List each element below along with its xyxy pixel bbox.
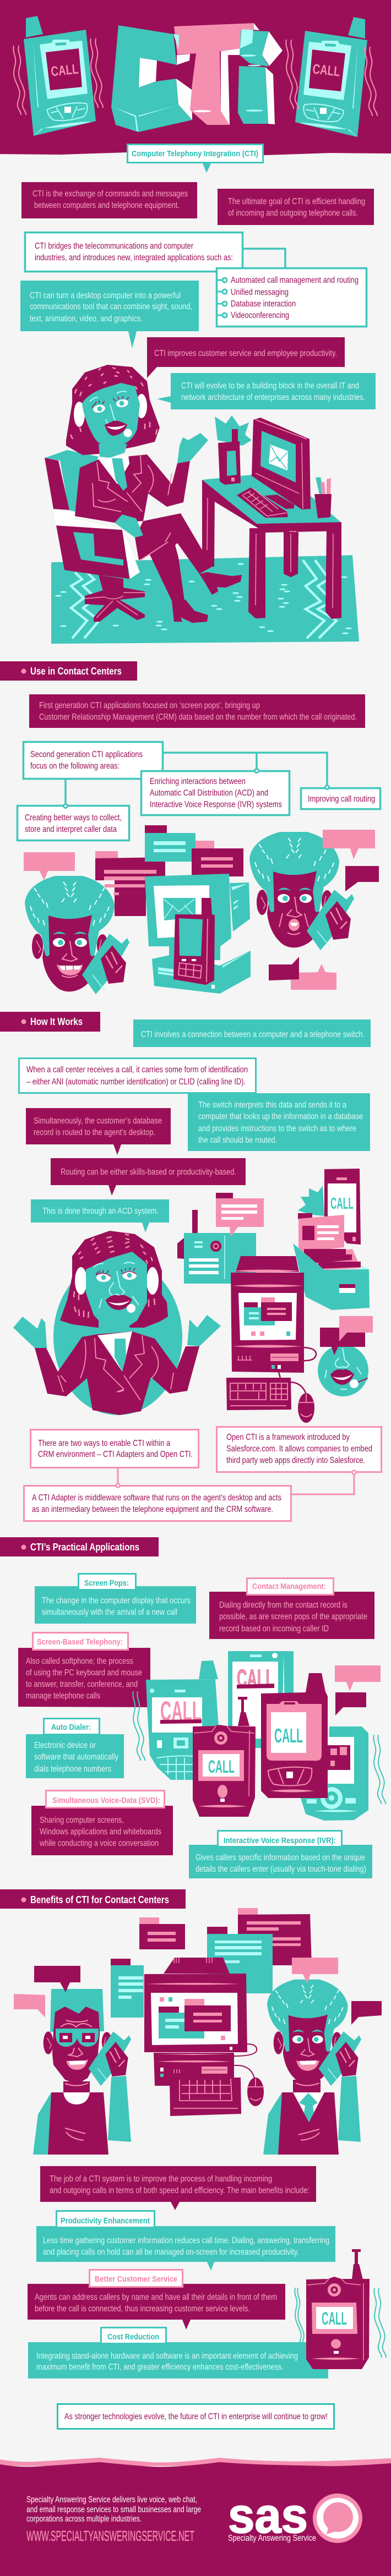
logo: SAS: Specialty Answering Service bbox=[228, 2534, 316, 2543]
card: Productivity Enhancement bbox=[36, 2211, 335, 2271]
speech bubble: ACD system: This is done through an ACD system. bbox=[42, 1207, 159, 1216]
speech bubble: desktop computer: text, animation, video, and graphics. bbox=[30, 314, 143, 324]
speech bubble: maroon over man with glasses bbox=[34, 1966, 80, 1992]
card: Screen Pops: simultaneously with the arrival of a new call bbox=[42, 1608, 177, 1617]
text block: exchange of commands bbox=[21, 182, 197, 218]
text block: enriching interactions: Automatic Call Distribution (ACD) and bbox=[150, 788, 268, 798]
card: Auto Dialer: software that automatically bbox=[34, 1752, 118, 1762]
footer text bbox=[26, 2495, 201, 2544]
section heading: Use in Contact Centers: Use in Contact Centers bbox=[30, 666, 122, 677]
icon: left ringing phone bbox=[13, 16, 103, 136]
text block: ultimate goal: The ultimate goal of CTI is efficient handling bbox=[228, 197, 365, 206]
illustration: cluster of phones: CALL bbox=[237, 1664, 274, 1692]
illustration: desktop computer bbox=[144, 1958, 264, 2116]
connector: pink links bbox=[118, 1468, 354, 1494]
list: integrated applications: Videoconferencing bbox=[231, 311, 289, 320]
illustration: seated woman agent bbox=[66, 365, 242, 623]
card: Better Customer Service: Better Customer Service bbox=[95, 2274, 177, 2284]
illustration: phone and file box: CALL bbox=[330, 1195, 354, 1213]
text block: future of CTI: As stronger technologies evolve, the future of CTI in enterprise will continue to grow! bbox=[64, 2412, 328, 2421]
speech bubble: desktop computer bbox=[20, 281, 199, 348]
text block: ultimate goal bbox=[218, 189, 374, 225]
speech bubble: improves service bbox=[147, 337, 345, 378]
card: Auto Dialer bbox=[26, 1719, 124, 1778]
illustration: cluster of phones: CALL bbox=[160, 1696, 202, 1727]
text block: CTI Adapter: A CTI Adapter is middleware software that runs on the agent’s desktop and acts bbox=[32, 1493, 281, 1503]
text block: exchange of commands: between computers and telephone equipment. bbox=[34, 201, 180, 210]
card: Screen-Based Telephony: Screen-Based Telephony: bbox=[37, 1637, 123, 1647]
illustration: cluster of phones bbox=[133, 1651, 385, 1821]
text block: job of a CTI system: The job of a CTI system is to improve the process of handling incoming bbox=[50, 2174, 272, 2184]
logo: SAS bbox=[228, 2489, 362, 2544]
speech bubble: desktop computer: CTI can turn a desktop computer into a powerful bbox=[30, 291, 181, 300]
text block: CTI bridges: industries, and introduces new, integrated applications such as: bbox=[35, 253, 233, 262]
text block: creating better ways: store and interpret caller data bbox=[25, 825, 117, 834]
illustration: man with glasses bbox=[33, 1989, 131, 2155]
speech bubble: customer database bbox=[26, 1108, 171, 1155]
footer text: Specialty Answering Service delivers live voice, web chat, bbox=[26, 2495, 197, 2504]
text block: creating better ways: Creating better ways to collect, bbox=[25, 813, 122, 823]
text block: call identification: When a call center receives a call, it carries some form of identification bbox=[26, 1065, 248, 1075]
text block: job of a CTI system bbox=[40, 2166, 316, 2210]
card: Auto Dialer: Auto Dialer: bbox=[51, 1723, 91, 1732]
illustration: folders and computer bbox=[95, 825, 251, 994]
card: Simultaneous Voice-Data: Windows applications and whiteboards bbox=[40, 1827, 161, 1837]
text block: second generation: focus on the following areas: bbox=[30, 761, 120, 771]
card: Screen-Based Telephony: to answer, transfer, conference, and bbox=[26, 1680, 138, 1689]
speech bubble: customer database: record is routed to the agent’s desktop. bbox=[34, 1128, 155, 1137]
illustration: office chair bbox=[45, 450, 145, 622]
footer text: and email response services to small businesses and large bbox=[26, 2505, 201, 2514]
card: Simultaneous Voice-Data bbox=[31, 1790, 173, 1855]
speech bubble: decorative pink left bbox=[24, 852, 75, 880]
connectors: second generation tree bbox=[66, 753, 327, 805]
card: Auto Dialer: Electronic device or bbox=[34, 1741, 96, 1750]
illustration: phone and file box bbox=[293, 1169, 370, 1310]
text block: first generation bbox=[29, 694, 365, 728]
speech bubble: maroon upper right bbox=[345, 866, 379, 891]
section heading: CTI's Practical Applications: CTI’s Practical Applications bbox=[30, 1542, 139, 1553]
text block: the switch interprets: and provides instructions to the switch as to where bbox=[198, 1124, 356, 1133]
text block: improving call routing bbox=[301, 786, 380, 809]
text block: call identification: – either ANI (automatic number identification) or CLID (calling line ID). bbox=[26, 1077, 246, 1087]
card: Simultaneous Voice-Data: Sharing computer screens, bbox=[40, 1816, 124, 1825]
text block: connection bbox=[133, 1020, 371, 1047]
list: integrated applications: Automated call management and routing bbox=[231, 276, 359, 285]
speech bubble: improves service: CTI improves customer service and employee productivity. bbox=[154, 349, 337, 358]
card: Screen Pops: The change in the computer display that occurs bbox=[42, 1596, 191, 1605]
card: Screen Pops bbox=[35, 1574, 196, 1624]
card: Screen Pops: Screen Pops: bbox=[84, 1579, 129, 1588]
text block: CTI Adapter bbox=[24, 1483, 291, 1521]
speech bubble: desktop computer: communications tool that can combine sight, sound, bbox=[30, 302, 192, 311]
text block: ultimate goal: of incoming and outgoing telephone calls. bbox=[228, 209, 358, 218]
text block: Open CTI: third party web apps directly into Salesforce. bbox=[226, 1456, 365, 1465]
logo: SAS: sas bbox=[228, 2489, 308, 2544]
section heading: Benefits: Benefits of CTI for Contact Centers bbox=[30, 1894, 169, 1905]
text block: the switch interprets: The switch interprets this data and sends it to a bbox=[198, 1100, 346, 1110]
card: Productivity Enhancement: Less time gathering customer information reduces call time. Dialing, answering, transferring bbox=[43, 2236, 329, 2245]
speech bubble: building block bbox=[157, 373, 376, 409]
card: Productivity Enhancement: Productivity Enhancement bbox=[61, 2216, 150, 2226]
card: Screen-Based Telephony bbox=[18, 1633, 150, 1707]
header band bbox=[0, 0, 391, 155]
footer wave and band bbox=[0, 2458, 391, 2576]
illustration: woman's head lower right bbox=[318, 1345, 368, 1396]
card: Contact Management: Contact Management: bbox=[252, 1582, 326, 1591]
illustration: floating documents bbox=[111, 1908, 312, 2018]
illustration: man with vest and tie bbox=[263, 1980, 361, 2155]
text block: two ways: There are two ways to enable CTI within a bbox=[38, 1439, 170, 1448]
speech bubble: pink center right bbox=[292, 1958, 338, 1983]
footer text: corporations across multiple industries. bbox=[26, 2514, 142, 2524]
icon: left ringing phone: CALL bbox=[50, 61, 79, 80]
section heading: How It Works: How It Works bbox=[30, 1016, 83, 1027]
illustration: router with pink note bbox=[177, 1193, 264, 1284]
card: Better Customer Service: Agents can address callers by name and have all their details in front of them bbox=[35, 2293, 277, 2302]
text block: CTI bridges bbox=[25, 232, 242, 272]
speech bubbles: phones cluster bbox=[335, 1665, 381, 1715]
text block: first generation: First generation CTI applications focused on ‘screen pops’, bringing up bbox=[39, 701, 260, 710]
card: Screen-Based Telephony: manage telephone calls bbox=[26, 1691, 100, 1701]
card: Auto Dialer: dials telephone numbers bbox=[34, 1764, 111, 1774]
text block: Open CTI bbox=[217, 1427, 381, 1475]
speech bubble: customer database: Simultaneously, the customer’s database bbox=[34, 1116, 162, 1126]
illustration: desktop computer with keyboard and mouse bbox=[226, 1256, 316, 1423]
card: Screen-Based Telephony: Also called softphone; the process bbox=[26, 1657, 133, 1666]
section heading: How It Works bbox=[0, 1012, 100, 1032]
section heading: CTI's Practical Applications bbox=[0, 1537, 159, 1556]
speech bubble: pink upper right bbox=[323, 830, 375, 859]
text block: future of CTI bbox=[57, 2404, 334, 2429]
illustration: man on phone right bbox=[249, 832, 354, 950]
illustration: phone beside benefits bbox=[295, 2249, 386, 2369]
speech bubbles: lower right pair bbox=[269, 957, 336, 990]
card: Cost Reduction bbox=[28, 2327, 328, 2378]
illustration: man on phone left bbox=[25, 876, 129, 994]
text block: the switch interprets: the call should be routed. bbox=[198, 1136, 277, 1145]
speech bubble: building block: CTI will evolve to be a building block in the overall IT and bbox=[181, 381, 359, 391]
subtitle callout bbox=[128, 144, 263, 173]
card: Cost Reduction: Cost Reduction bbox=[107, 2332, 159, 2342]
illustration: desk with computer bbox=[202, 415, 341, 619]
section heading: Use in Contact Centers bbox=[0, 661, 137, 681]
illustration: woman agent with arms raised bbox=[13, 1231, 221, 1415]
speech bubbles: above lower right head bbox=[320, 1316, 373, 1355]
icon: right ringing phone bbox=[286, 17, 377, 137]
card: Productivity Enhancement: and placing calls on hold can all be managed on-screen for increased productivity. bbox=[43, 2248, 299, 2257]
subtitle callout: Computer Telephony Integration (CTI) bbox=[132, 149, 258, 158]
card: Contact Management: Dialing directly from the contact record is bbox=[219, 1601, 347, 1610]
section heading: Benefits bbox=[0, 1889, 186, 1909]
card: Better Customer Service bbox=[28, 2270, 285, 2330]
footer text: WWW.SPECIALTYANSWERINGSERVICE.NET bbox=[26, 2528, 194, 2544]
speech bubble: pink beside man with glasses bbox=[14, 1994, 45, 2018]
text block: improving call routing: Improving call routing bbox=[308, 794, 375, 804]
card: Simultaneous Voice-Data: while conducting a voice conversation bbox=[39, 1839, 159, 1848]
illustration: cluster of phones: CALL bbox=[208, 1757, 235, 1777]
text block: second generation bbox=[23, 742, 163, 779]
text block: two ways: CRM environment – CTI Adapters and Open CTI. bbox=[38, 1450, 193, 1459]
card: Better Customer Service: before the call is connected, thus increasing customer service levels. bbox=[35, 2304, 250, 2314]
card: Cost Reduction: maximum benefit from CTI, and greater efficiency enhances cost-effectiveness. bbox=[36, 2363, 284, 2372]
text block: Open CTI: Open CTI is a framework introduced by bbox=[226, 1433, 350, 1442]
text block: creating better ways bbox=[18, 804, 129, 841]
speech bubble: maroon far right bbox=[351, 2001, 382, 2025]
text block: job of a CTI system: and outgoing calls in terms of both speed and efficiency. The main benefits include: bbox=[50, 2186, 309, 2195]
illustration: cluster of phones: CALL bbox=[274, 1724, 303, 1747]
card: Interactive Voice Response: Interactive Voice Response (IVR): bbox=[224, 1836, 336, 1845]
icon: right ringing phone: CALL bbox=[312, 61, 341, 80]
text block: CTI Adapter: as an intermediary between the telephone equipment and the CRM software. bbox=[32, 1505, 273, 1514]
text block: enriching interactions: Interactive Voice Response (IVR) systems bbox=[150, 800, 282, 809]
text block: two ways bbox=[31, 1429, 198, 1468]
illustration: phone beside benefits: CALL bbox=[322, 2309, 347, 2328]
text block: exchange of commands: CTI is the exchange of commands and messages bbox=[32, 189, 188, 199]
connector: bridges to list bbox=[243, 249, 285, 268]
text block: call identification bbox=[19, 1059, 256, 1093]
illustration: rug bbox=[51, 555, 359, 644]
speech bubble: routing: Routing can be either skills-based or productivity-based. bbox=[61, 1168, 236, 1177]
text block: CTI bridges: CTI bridges the telecommunications and computer bbox=[35, 242, 193, 251]
list: integrated applications: Unified messaging bbox=[231, 288, 289, 297]
speech bubble: routing bbox=[51, 1158, 246, 1196]
card: Screen-Based Telephony: of using the PC keyboard and mouse bbox=[26, 1668, 142, 1678]
card: Contact Management: record based on incoming caller ID bbox=[219, 1624, 329, 1634]
list: integrated applications: Database interaction bbox=[231, 299, 296, 309]
text block: the switch interprets bbox=[188, 1093, 370, 1151]
card: Cost Reduction: Integrating stand-alone hardware and software is an important element of achieving bbox=[36, 2352, 298, 2361]
text block: enriching interactions bbox=[141, 769, 290, 815]
card: Interactive Voice Response bbox=[189, 1831, 372, 1878]
text block: enriching interactions: Enriching interactions between bbox=[150, 777, 246, 786]
card: Simultaneous Voice-Data: Simultaneous Voice-Data (SVD): bbox=[52, 1796, 160, 1805]
list: integrated applications bbox=[217, 268, 367, 327]
title: CTI block letters bbox=[111, 23, 283, 132]
card: Contact Management bbox=[209, 1578, 374, 1639]
text block: second generation: Second generation CTI applications bbox=[30, 750, 143, 759]
speech bubble: ACD system bbox=[31, 1199, 169, 1232]
